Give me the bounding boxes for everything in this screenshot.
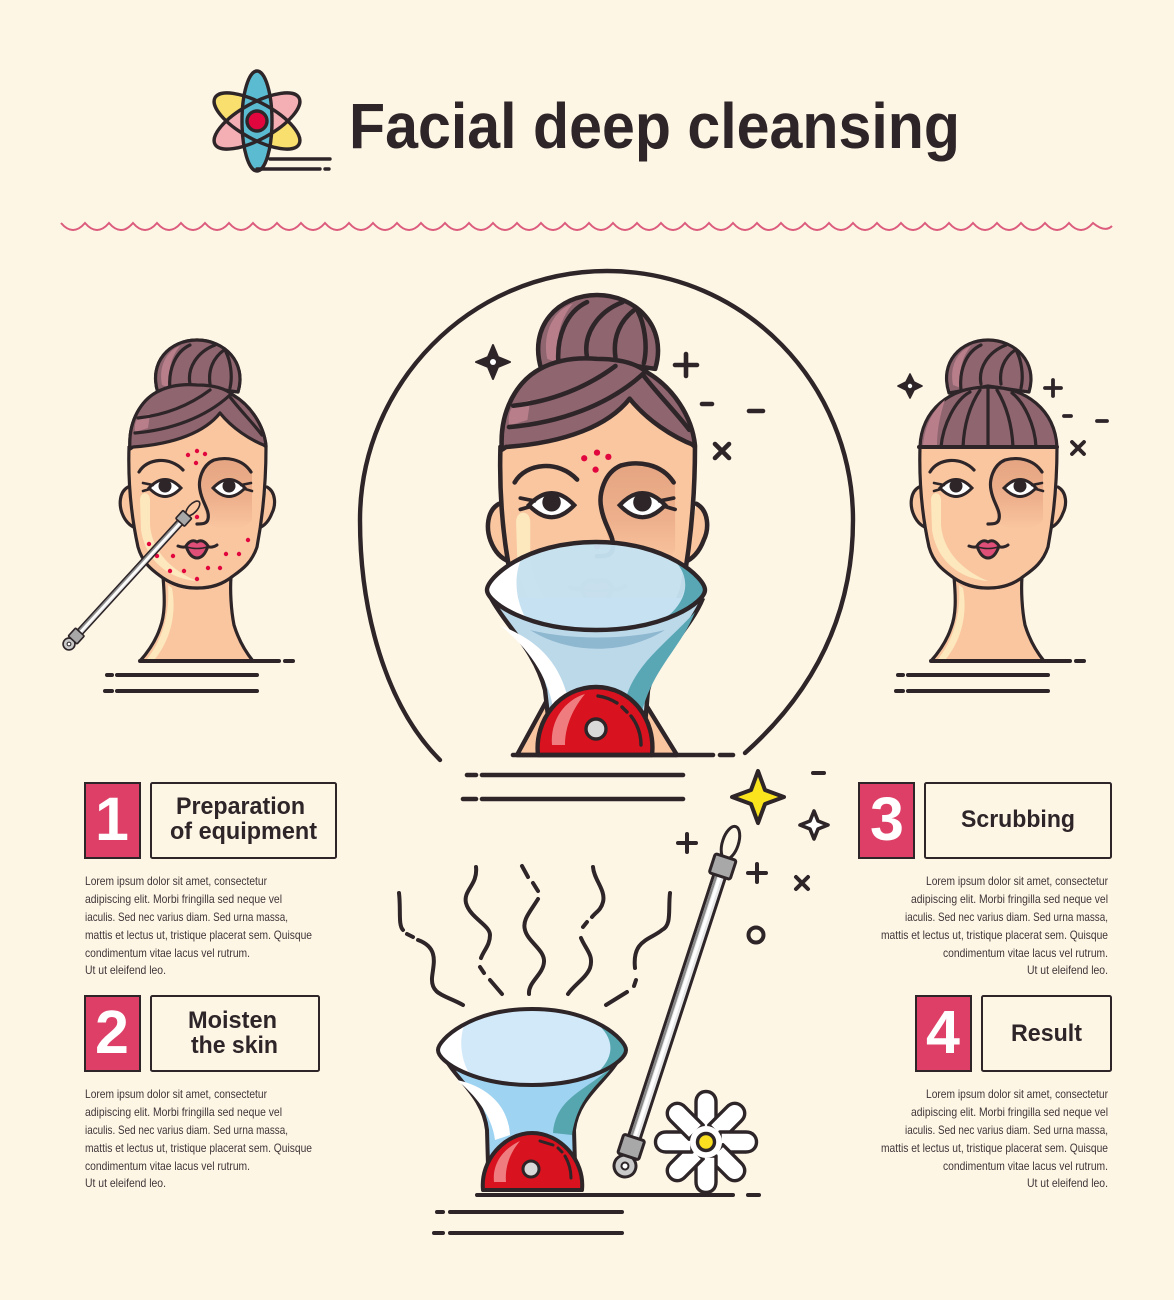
illustration: centre face over steamer	[360, 271, 853, 799]
body text: Lorem ipsum dolor sit amet, consectetur	[926, 1087, 1108, 1101]
tool: comedone extractor	[611, 823, 746, 1180]
arc frame	[360, 271, 853, 760]
body text: adipiscing elit. Morbi fringilla sed neque vel	[85, 1105, 282, 1119]
head	[488, 295, 707, 647]
panel: step 1	[85, 783, 336, 977]
body text: condimentum vitae lacus vel rutrum.	[85, 1159, 250, 1173]
body text	[881, 874, 1108, 977]
panel: step 4	[881, 996, 1111, 1190]
icon: atom logo	[206, 71, 330, 171]
base lines	[463, 755, 733, 799]
title: Facial deep cleansing	[349, 90, 960, 162]
body text: mattis et lectus ut, tristique placerat sem. Quisque	[85, 1141, 312, 1155]
body text: adipiscing elit. Morbi fringilla sed neque vel	[911, 892, 1108, 906]
body text: Ut ut eleifend leo.	[85, 963, 166, 977]
panel: step 1: 1	[95, 785, 129, 853]
panel: step 3: Scrubbing	[961, 806, 1075, 833]
body text: condimentum vitae lacus vel rutrum.	[943, 946, 1108, 960]
panel: step 1: of equipment	[170, 818, 317, 845]
base lines	[434, 1195, 759, 1233]
panel: step 3: 3	[870, 785, 904, 853]
steamer dome	[483, 1133, 582, 1190]
number badge 3	[859, 783, 914, 858]
label box	[151, 996, 319, 1071]
number badge 1	[85, 783, 140, 858]
body text: mattis et lectus ut, tristique placerat sem. Quisque	[881, 1141, 1108, 1155]
body text: iaculis. Sed nec varius diam. Sed urna massa,	[85, 910, 288, 924]
body text: mattis et lectus ut, tristique placerat sem. Quisque	[85, 928, 312, 942]
panel: step 1: Preparation	[176, 793, 305, 820]
panel: step 3	[859, 783, 1111, 977]
label box	[925, 783, 1111, 858]
icon: small sparkle	[800, 811, 828, 839]
label box	[151, 783, 336, 858]
body text: Ut ut eleifend leo.	[1027, 963, 1108, 977]
illustration: left face with tool	[61, 340, 293, 691]
body text: Lorem ipsum dolor sit amet, consectetur	[926, 874, 1108, 888]
steamer body	[442, 1053, 622, 1165]
panel: step 4: 4	[926, 998, 960, 1066]
base lines	[105, 661, 293, 691]
number badge 4	[916, 996, 971, 1071]
divider: scalloped line	[61, 223, 1112, 230]
panel: step 2: the skin	[191, 1032, 278, 1059]
body text	[85, 874, 312, 977]
body text: Lorem ipsum dolor sit amet, consectetur	[85, 874, 267, 888]
icon: daisy flower	[656, 1092, 756, 1192]
fringe hair	[920, 387, 1057, 447]
panel: step 4: Result	[1011, 1020, 1082, 1047]
illustration: right face, clean skin	[896, 340, 1107, 691]
body text: adipiscing elit. Morbi fringilla sed neque vel	[911, 1105, 1108, 1119]
body text	[85, 1087, 312, 1190]
sparkle icons	[476, 345, 510, 379]
panel: step 2: 2	[95, 998, 129, 1066]
acne spots	[147, 449, 250, 581]
body text: adipiscing elit. Morbi fringilla sed neque vel	[85, 892, 282, 906]
body text: condimentum vitae lacus vel rutrum.	[943, 1159, 1108, 1173]
panel: step 2	[85, 996, 319, 1190]
sparkle icons	[898, 374, 922, 398]
body text: mattis et lectus ut, tristique placerat sem. Quisque	[881, 928, 1108, 942]
steamer rim	[438, 1009, 626, 1085]
illustration: equipment group	[399, 771, 828, 1233]
body text: iaculis. Sed nec varius diam. Sed urna massa,	[905, 910, 1108, 924]
body text: iaculis. Sed nec varius diam. Sed urna massa,	[905, 1123, 1108, 1137]
icon: ring	[748, 928, 764, 942]
body text: condimentum vitae lacus vel rutrum.	[85, 946, 250, 960]
body text: Ut ut eleifend leo.	[1027, 1176, 1108, 1190]
icon: yellow sparkle	[732, 771, 784, 823]
body text: Lorem ipsum dolor sit amet, consectetur	[85, 1087, 267, 1101]
icon: plus, cross and dash marks	[678, 773, 824, 889]
steam lines	[399, 866, 670, 1005]
steamer dome	[538, 687, 652, 755]
label box	[982, 996, 1111, 1071]
steamer	[517, 700, 677, 755]
tool: comedone extractor small	[61, 498, 203, 652]
base lines	[896, 661, 1084, 691]
panel: step 2: Moisten	[188, 1007, 277, 1034]
number badge 2	[85, 996, 140, 1071]
body text: iaculis. Sed nec varius diam. Sed urna massa,	[85, 1123, 288, 1137]
body text	[881, 1087, 1108, 1190]
body text: Ut ut eleifend leo.	[85, 1176, 166, 1190]
